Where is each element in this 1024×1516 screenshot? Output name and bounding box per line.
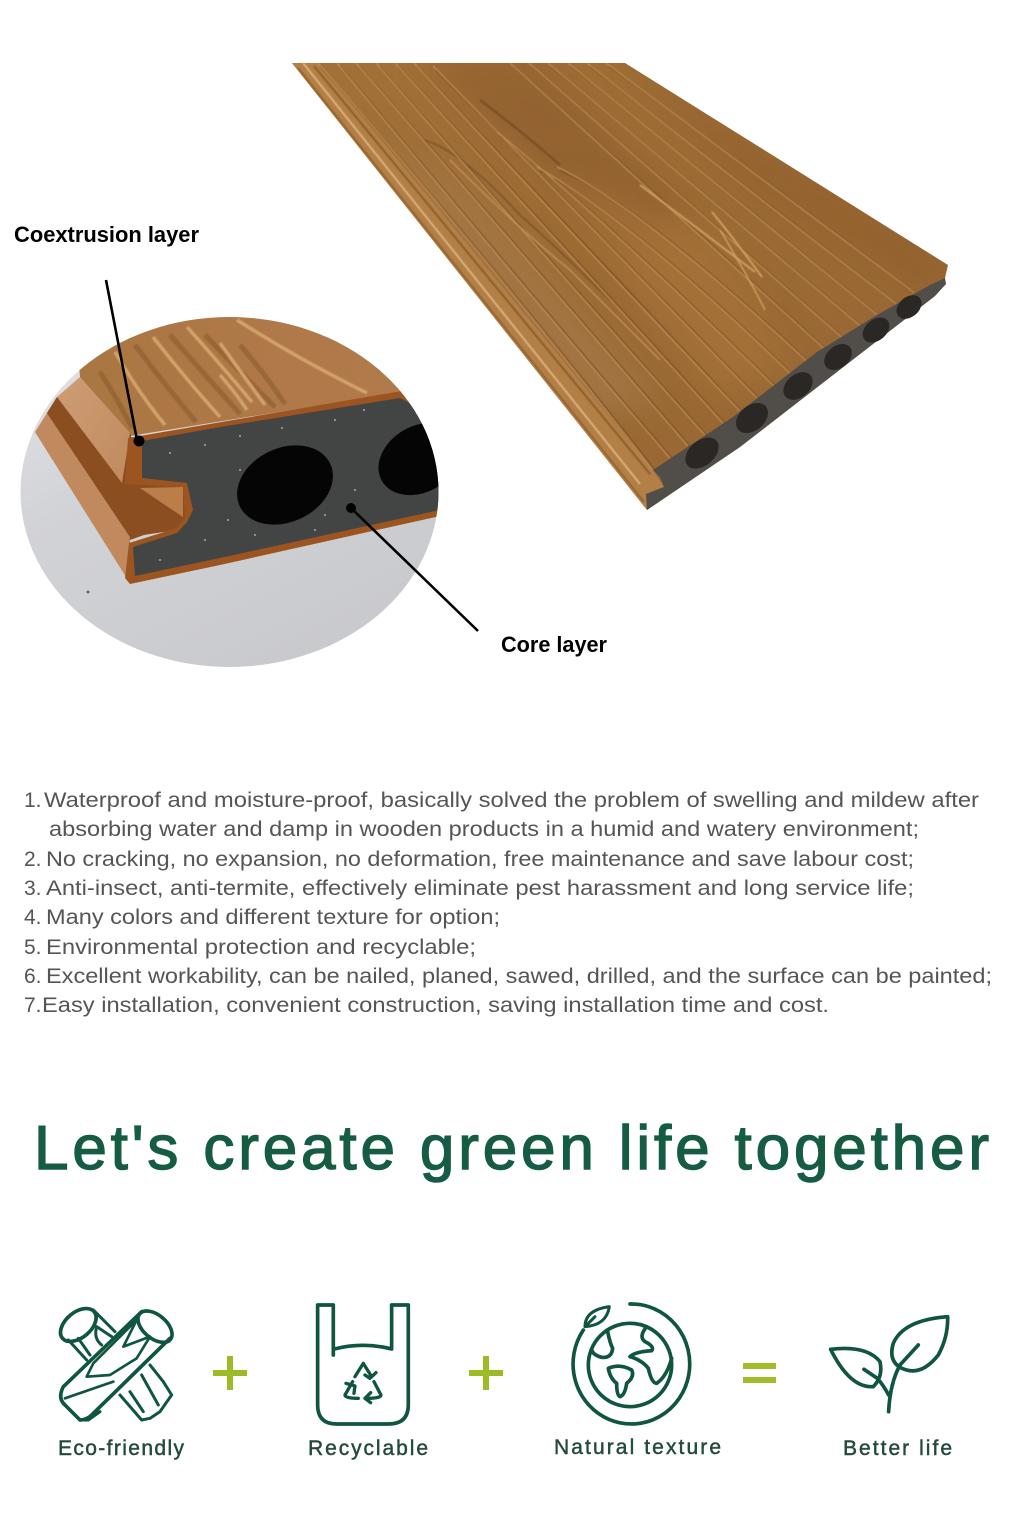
feature list: 7. xyxy=(24,994,42,1017)
close-up dark band xyxy=(47,397,185,537)
close-up lower band xyxy=(35,413,130,577)
feature list: Excellent workability, can be nailed, planed, sawed, drilled, and the surface can be painted; xyxy=(46,965,992,988)
board front face xyxy=(646,278,946,510)
board side edge xyxy=(292,63,664,510)
icon: plus xyxy=(213,1356,247,1390)
feature list: 2. xyxy=(24,848,42,871)
close-up hole 2 xyxy=(378,424,438,496)
callout: core label: Core layer xyxy=(501,632,607,657)
feature list: 6. xyxy=(24,965,42,988)
feature list xyxy=(24,789,992,1017)
feature list: 4. xyxy=(24,906,42,929)
board hollow holes xyxy=(679,290,926,475)
close-up core xyxy=(133,398,440,576)
pointer: coextrusion layer xyxy=(106,280,144,446)
feature list: No cracking, no expansion, no deformation, free maintenance and save labour cost; xyxy=(46,848,914,871)
feature list: Environmental protection and recyclable; xyxy=(46,936,476,959)
close-up wood surface xyxy=(80,317,401,436)
photo: decking board xyxy=(292,60,950,510)
feature list: Waterproof and moisture-proof, basically solved the problem of swelling and mildew after xyxy=(44,789,979,812)
feature list: Many colors and different texture for option; xyxy=(46,906,500,929)
close-up grain xyxy=(100,320,367,428)
board tonal shading xyxy=(414,63,947,410)
circular close-up of board cross-section xyxy=(20,317,438,667)
icon: plus xyxy=(469,1356,503,1390)
recycle arrows xyxy=(345,1363,381,1403)
close-up tongue highlight xyxy=(140,487,183,517)
close-up orange skin xyxy=(125,391,440,584)
icon: globe with leaf xyxy=(573,1304,690,1424)
core speckles xyxy=(159,409,365,561)
feature list: 1. xyxy=(24,789,42,812)
icon: recyclable bag xyxy=(318,1305,408,1424)
label: recyclable: Recyclable xyxy=(308,1437,428,1460)
label: eco-friendly: Eco-friendly xyxy=(58,1437,184,1460)
feature list: 3. xyxy=(24,877,42,900)
feature list: 5. xyxy=(24,936,42,959)
icon: sprout xyxy=(831,1317,948,1412)
close-up hole 1 xyxy=(237,445,333,525)
side edge grooves xyxy=(298,63,650,502)
label: better life: Better life xyxy=(843,1437,952,1460)
callout: coextrusion label: Coextrusion layer xyxy=(14,222,199,247)
label: natural texture: Natural texture xyxy=(554,1436,721,1459)
heading: Let's create green life together xyxy=(34,1114,989,1183)
board wood grain xyxy=(318,63,918,472)
icon: crossed logs xyxy=(54,1302,178,1420)
pointer: core layer xyxy=(346,503,478,631)
feature list: Anti-insect, anti-termite, effectively eliminate pest harassment and long service life; xyxy=(46,877,914,900)
feature list: absorbing water and damp in wooden products in a humid and watery environment; xyxy=(49,818,919,841)
close-up band underlay xyxy=(47,397,185,543)
close-up light band xyxy=(57,377,130,483)
feature list: Easy installation, convenient construction, saving installation time and cost. xyxy=(42,994,829,1017)
icon: equals xyxy=(743,1363,776,1383)
